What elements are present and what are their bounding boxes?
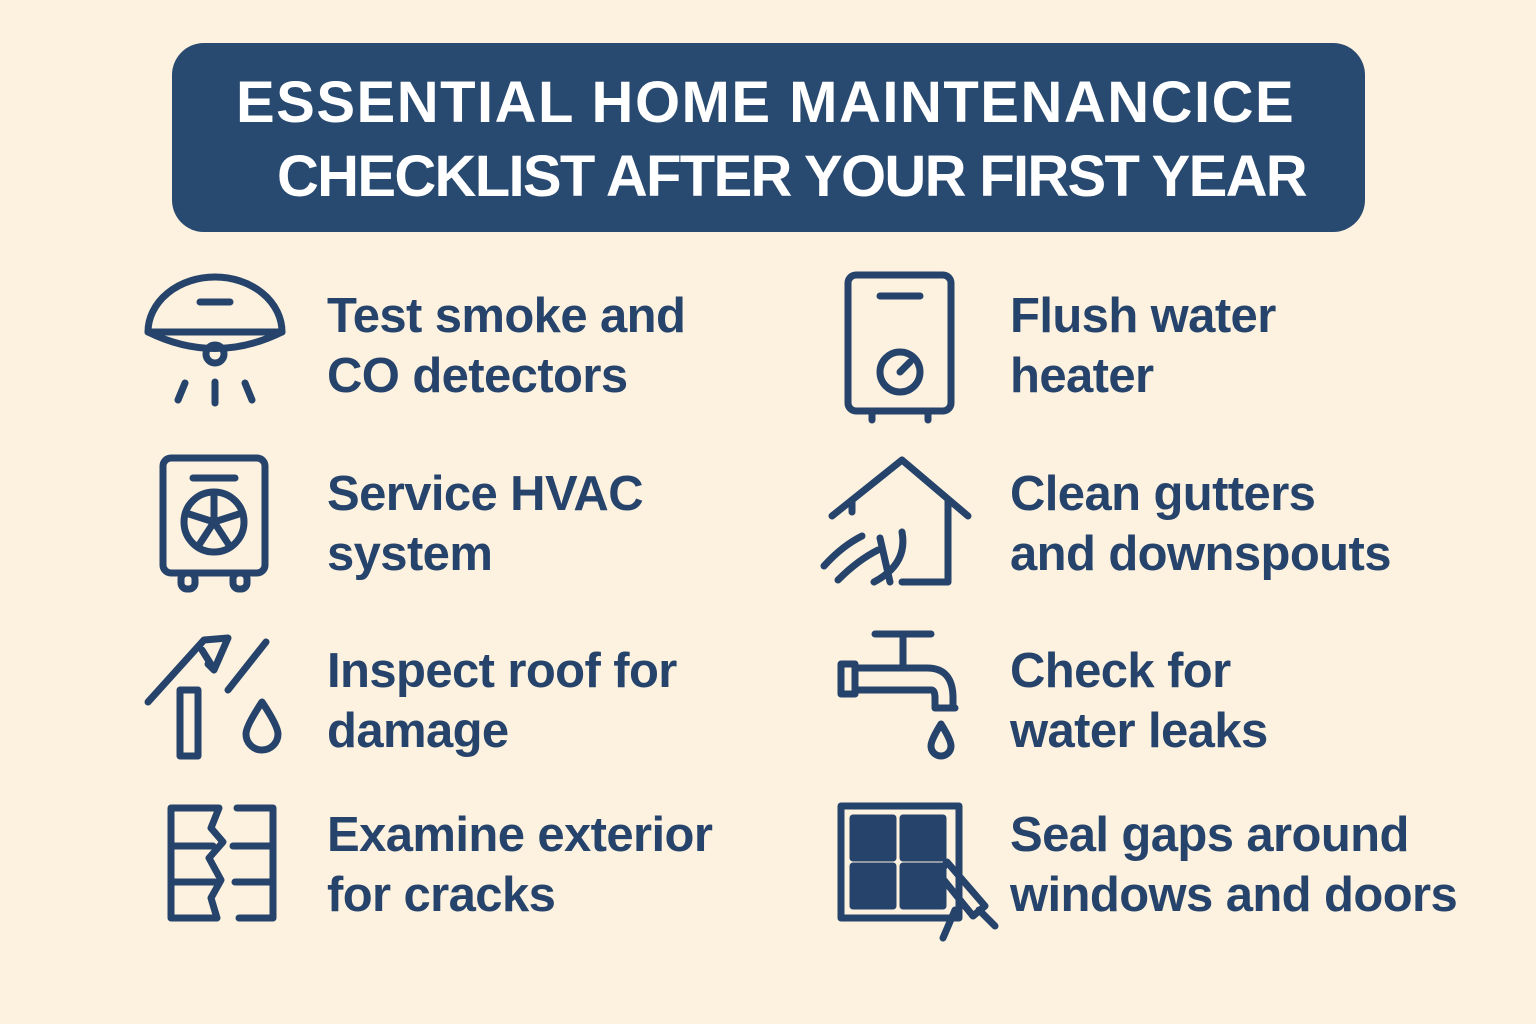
title: CHECKLIST AFTER YOUR FIRST YEAR — [277, 144, 1306, 209]
text: cracks — [327, 808, 712, 922]
text: gutters: and downspouts — [1010, 527, 1391, 581]
text: gutters: Clean gutters — [1010, 467, 1315, 521]
text: smoke: Test smoke and — [327, 289, 685, 343]
text: seal: windows and doors — [1010, 868, 1457, 922]
title — [172, 43, 1365, 232]
icon: smoke detector — [144, 274, 286, 406]
icon: window caulk — [838, 802, 998, 942]
text: HVAC: Service HVAC — [327, 467, 643, 521]
icon: cracked wall — [168, 804, 276, 922]
text: HVAC: system — [327, 527, 492, 581]
text: gutters — [1010, 467, 1391, 581]
icon: house gutters — [820, 456, 972, 586]
text: roof — [327, 644, 677, 758]
text: leaks — [1010, 644, 1268, 758]
text: seal — [1010, 808, 1457, 922]
text: smoke — [327, 289, 685, 403]
icon: roof drop — [144, 634, 282, 760]
text: cracks: Examine exterior — [327, 808, 712, 862]
text: leaks: Check for — [1010, 644, 1231, 698]
text: roof: Inspect roof for — [327, 644, 677, 698]
text: water heater: Flush water — [1010, 289, 1276, 343]
text: water heater — [1010, 289, 1276, 403]
icon: HVAC — [160, 454, 268, 592]
icon: faucet — [838, 630, 958, 760]
text: water heater: heater — [1010, 349, 1153, 403]
text: leaks: water leaks — [1010, 704, 1268, 758]
icon: water heater — [844, 272, 954, 424]
title: ESSENTIAL HOME MAINTENANCICE — [236, 70, 1295, 135]
text: seal: Seal gaps around — [1010, 808, 1409, 862]
text: smoke: CO detectors — [327, 349, 628, 403]
text: HVAC — [327, 467, 643, 581]
text: cracks: for cracks — [327, 868, 555, 922]
text: roof: damage — [327, 704, 509, 758]
